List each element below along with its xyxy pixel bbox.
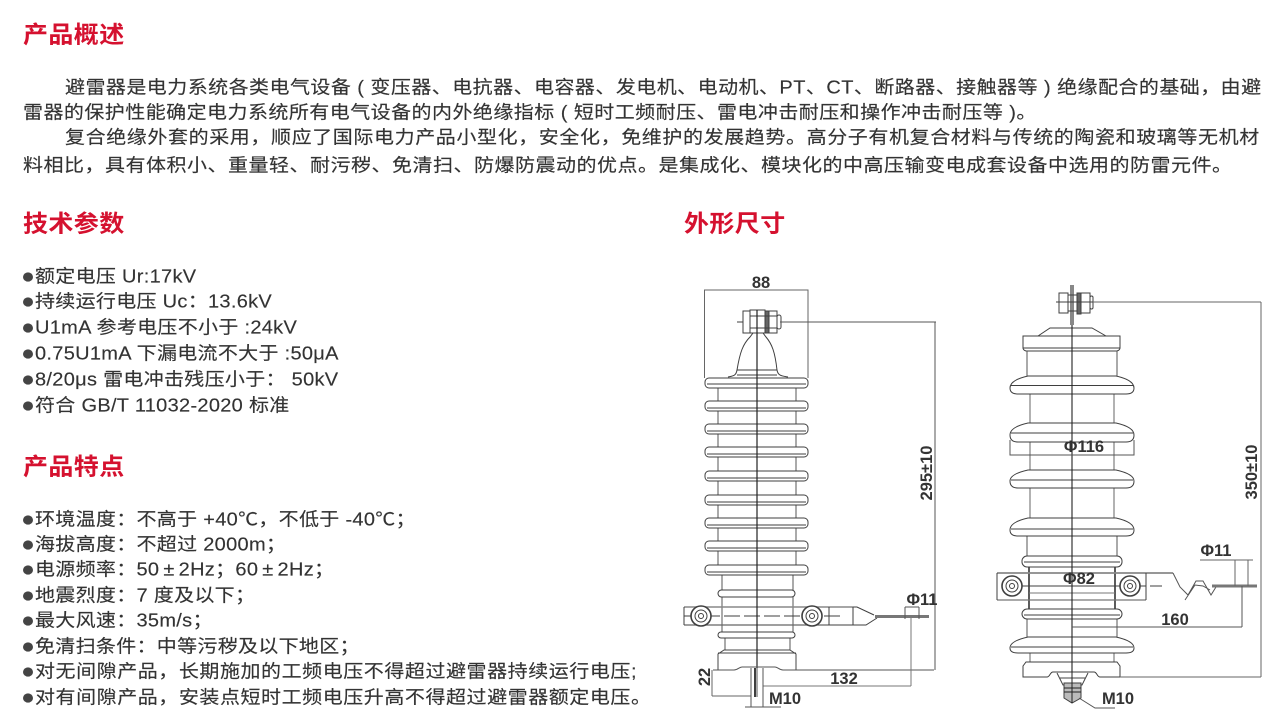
dimension: length 160 <box>1072 586 1242 629</box>
text block: product features list: 免清扫条件：中等污秽及以下地区； <box>35 637 360 657</box>
text block: technical parameters list: 额定电压 Ur:17kV <box>35 267 196 287</box>
text block: product features list: 地震烈度：7 度及以下； <box>35 586 255 606</box>
dimension: diameter 116: Φ116 <box>1064 438 1104 456</box>
left centre line <box>756 310 758 668</box>
dimension: height 22 <box>696 668 751 696</box>
text block: product features list: 海拔高度：不超过 2000m； <box>35 535 286 555</box>
diagram: right arrester <box>997 285 1261 708</box>
text block: product features list <box>23 510 652 708</box>
dimension: left hole diameter: Φ11 <box>906 591 938 609</box>
right insulator core <box>1027 351 1117 637</box>
dimension: height 295 <box>780 322 936 670</box>
left insulator core <box>718 387 796 650</box>
dimension: length 160: 160 <box>1161 611 1189 629</box>
dimension: diameter 82: Φ82 <box>1063 570 1095 588</box>
heading: product features: 产品特点 <box>23 454 125 480</box>
text block: technical parameters list: 8/20μs 雷电冲击残压小于： 50kV <box>35 370 338 390</box>
text block: product features list: 环境温度：不高于 +40℃，不低于 -40℃； <box>35 510 416 530</box>
dimension: right hole diameter <box>1200 542 1253 586</box>
text block: technical parameters list: U1mA 参考电压不小于 :24kV <box>35 318 297 338</box>
diagram: left arrester <box>684 274 938 708</box>
dimension: length 132 <box>713 616 934 688</box>
dimension: left stud M10 <box>745 668 801 708</box>
icon: left top terminal bolt <box>737 310 781 333</box>
dimension: height 350 <box>1093 302 1261 677</box>
right insulator sheds <box>1010 376 1134 653</box>
dimension: height 22: 22 <box>696 668 714 686</box>
dimension: height 295: 295±10 <box>918 446 936 500</box>
text block: technical parameters list: 符合 GB/T 11032-2020 标准 <box>35 396 290 416</box>
left insulator head <box>728 333 788 377</box>
dimension: length 132: 132 <box>830 670 858 688</box>
dimension: width 88 <box>704 274 808 378</box>
text block: product overview paragraphs: 复合绝缘外套的采用，顺应了国际电力产品小型化，安全化，免维护的发展趋势。高分子有机复合材料与传统的陶瓷和玻璃等无机材 <box>65 128 1260 148</box>
dimension: diameter 116 <box>1010 438 1134 456</box>
right insulator base <box>1023 662 1120 677</box>
left insulator sheds <box>705 378 808 638</box>
text block: product overview paragraphs <box>23 78 1262 176</box>
text block: product overview paragraphs: 雷器的保护性能确定电力系统所有电气设备的内外绝缘指标 ( 短时工频耐压、雷电冲击耐压和操作冲击耐压等 )。 <box>23 103 1037 123</box>
right centre line <box>1071 325 1073 672</box>
text block: technical parameters list <box>23 266 339 416</box>
text block: product features list: 对无间隙产品，长期施加的工频电压不得超过避雷器持续运行电压; <box>35 662 637 682</box>
left insulator base <box>718 650 796 670</box>
dimension: left stud M10: M10 <box>769 690 801 708</box>
icon: right top terminal bolt <box>1056 285 1093 325</box>
text block: product overview paragraphs: 料相比，具有体积小、重量轻、耐污秽、免清扫、防爆防震动的优点。是集成化、模块化的中高压输变电成套设备中选用的防雷元件。 <box>23 156 1232 176</box>
dimension: height 350: 350±10 <box>1243 445 1261 499</box>
heading: outline dimensions: 外形尺寸 <box>684 211 786 237</box>
text block: technical parameters list: 持续运行电压 Uc：13.6kV <box>35 292 272 312</box>
text block: technical parameters list: 0.75U1mA 下漏电流不大于 :50μA <box>35 344 339 364</box>
dimension: right stud M10 <box>1057 672 1134 708</box>
text block: product features list: 对有间隙产品，安装点短时工频电压升高不得超过避雷器额定电压。 <box>35 688 652 708</box>
text block: product overview paragraphs: 避雷器是电力系统各类电气设备 ( 变压器、电抗器、电容器、发电机、电动机、PT、CT、断路器、接触器等 ) 绝缘配合的基础，由避 <box>65 78 1262 98</box>
dimension: left hole diameter <box>905 591 938 619</box>
heading: technical parameters: 技术参数 <box>23 211 125 237</box>
dimension: right hole diameter: Φ11 <box>1200 542 1232 560</box>
dimension: right stud M10: M10 <box>1102 690 1134 708</box>
text block: product features list: 电源频率：50±2Hz；60±2Hz； <box>35 560 334 580</box>
right insulator cap <box>1023 328 1120 351</box>
right mounting bracket <box>997 573 1257 600</box>
dimension: width 88: 88 <box>752 274 770 292</box>
text block: product features list: 最大风速：35m/s； <box>35 611 213 631</box>
heading: product overview: 产品概述 <box>23 22 125 48</box>
left mounting bracket <box>684 606 929 626</box>
